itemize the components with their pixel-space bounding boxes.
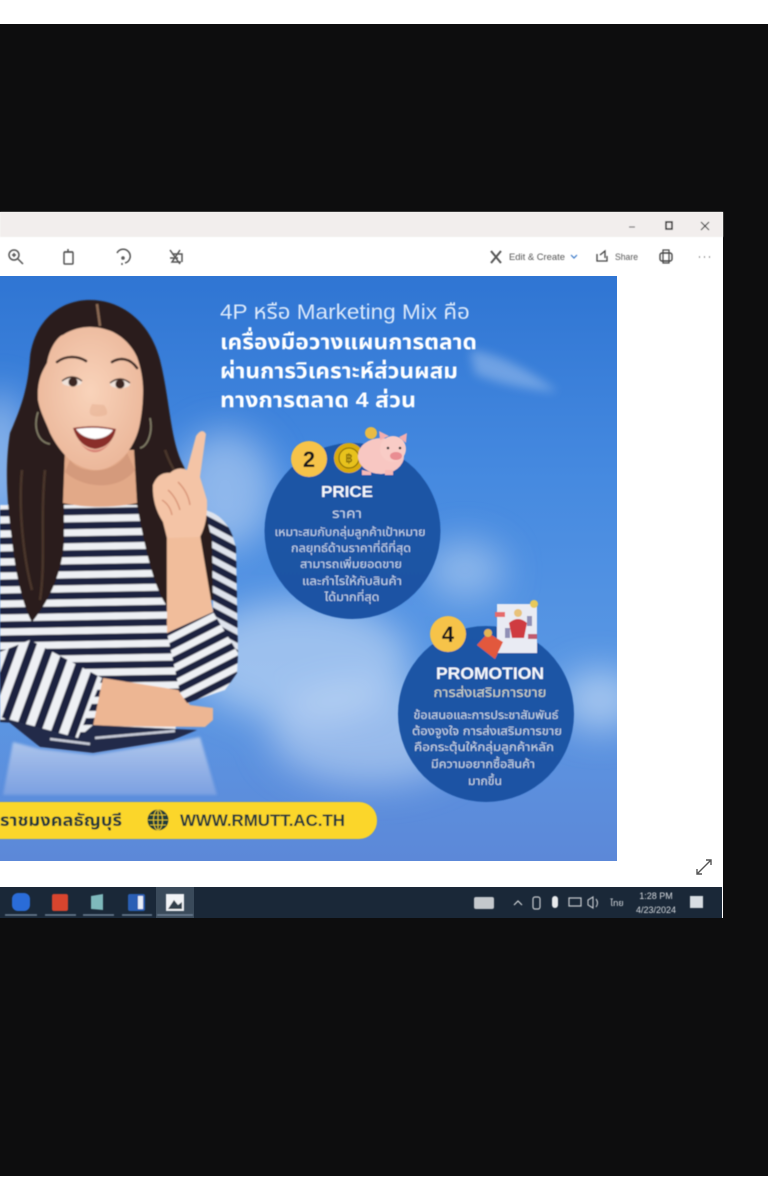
headline: เครื่องมือวางแผนการตลาด: [220, 327, 477, 354]
hair: [7, 300, 216, 622]
promotion disc: [398, 626, 574, 802]
right sleeve cuff: [167, 612, 238, 703]
shirt hem: [0, 715, 197, 753]
earrings: [36, 412, 151, 448]
smile: [73, 426, 116, 452]
banner: [0, 802, 377, 839]
upper sleeve: [205, 510, 238, 655]
icon: piggy bank: [358, 427, 407, 475]
toolbar actions right: [491, 250, 710, 263]
system tray: ไทย: [609, 898, 624, 908]
promotion text block: มากขึ้น: [468, 773, 502, 788]
shirt torso: [77, 506, 167, 738]
taskbar app icons: [5, 893, 193, 915]
price text block: เหมาะสมกับกลุ่มลูกค้าเป้าหมาย: [274, 525, 426, 539]
eyebrows: [57, 357, 137, 368]
toolbar actions right: Share: [615, 252, 638, 263]
hair part: [97, 304, 100, 326]
icon: expand arrow: [697, 860, 711, 874]
banner university name: ราชมงคลธัญบุรี: [0, 811, 122, 831]
price text block: [274, 506, 426, 604]
eyes: [62, 377, 130, 389]
price text block: สามารถเพิ่มยอดขาย: [300, 557, 402, 571]
woman figure: [0, 300, 238, 795]
trousers: [3, 737, 217, 795]
website URL: WWW.RMUTT.AC.TH: [180, 811, 345, 830]
app window: [0, 212, 723, 918]
icon: globe: [148, 810, 168, 830]
toolbar icons left: [9, 249, 182, 265]
badge number 2: 2: [303, 447, 315, 472]
poster image: [0, 276, 640, 861]
price disc: [264, 443, 440, 619]
headline: 4P หรือ Marketing Mix คือ: [220, 301, 470, 324]
icon: gold coin: ฿: [345, 451, 353, 466]
system tray: [474, 891, 703, 915]
panel: promotion: [398, 600, 574, 802]
badge number 2: [291, 441, 327, 477]
hair highlights: [21, 450, 190, 600]
promotion text block: มีความอยากซื้อสินค้า: [431, 756, 535, 771]
panel: price: [264, 427, 440, 619]
title bar: [0, 212, 723, 237]
price text block: ราคา: [332, 506, 362, 521]
neck: [63, 450, 137, 507]
toolbar actions right: Edit & Create: [509, 252, 565, 263]
price text block: กลยุทธ์ด้านราคาที่ดีที่สุด: [291, 540, 411, 555]
windows taskbar: [0, 887, 722, 918]
system tray: 4/23/2024: [636, 905, 676, 915]
promotion text block: การส่งเสริมการขาย: [434, 685, 546, 700]
clouds: [0, 390, 640, 785]
raised forearm: [167, 535, 213, 634]
price heading: PRICE: [321, 484, 373, 501]
promotion heading: PROMOTION: [436, 664, 544, 683]
neck shadow: [65, 453, 135, 485]
headline: ทางการตลาด 4 ส่วน: [220, 389, 416, 412]
badge number 4: [430, 616, 466, 652]
raised hand pointing: [153, 431, 207, 538]
icon: gold coin: [334, 443, 364, 473]
promotion text block: ต้องจูงใจ การส่งเสริมการขาย: [412, 724, 562, 738]
cloud streak: [470, 350, 558, 392]
promotion text block: ข้อเสนอและการประชาสัมพันธ์: [414, 708, 559, 722]
nose: [90, 404, 107, 416]
headline: ผ่านการวิเคราะห์ส่วนผสม: [220, 360, 458, 383]
crossed forearm: [93, 678, 213, 727]
system tray: 1:28 PM: [639, 891, 673, 901]
promotion text block: [412, 685, 562, 788]
face: [38, 327, 143, 470]
left sleeve: [0, 640, 102, 738]
headline: [220, 301, 477, 412]
icon: price tag: [477, 629, 503, 659]
icon: promotion poster: [495, 600, 538, 653]
badge number 4: 4: [442, 622, 455, 647]
shirt back layer: [0, 505, 180, 732]
promotion text block: คือกระตุ้นให้กลุ่มลูกค้าหลัก: [414, 740, 554, 754]
price text block: และกำไรให้กับสินค้า: [302, 574, 402, 588]
price text block: ได้มากที่สุด: [323, 589, 380, 604]
